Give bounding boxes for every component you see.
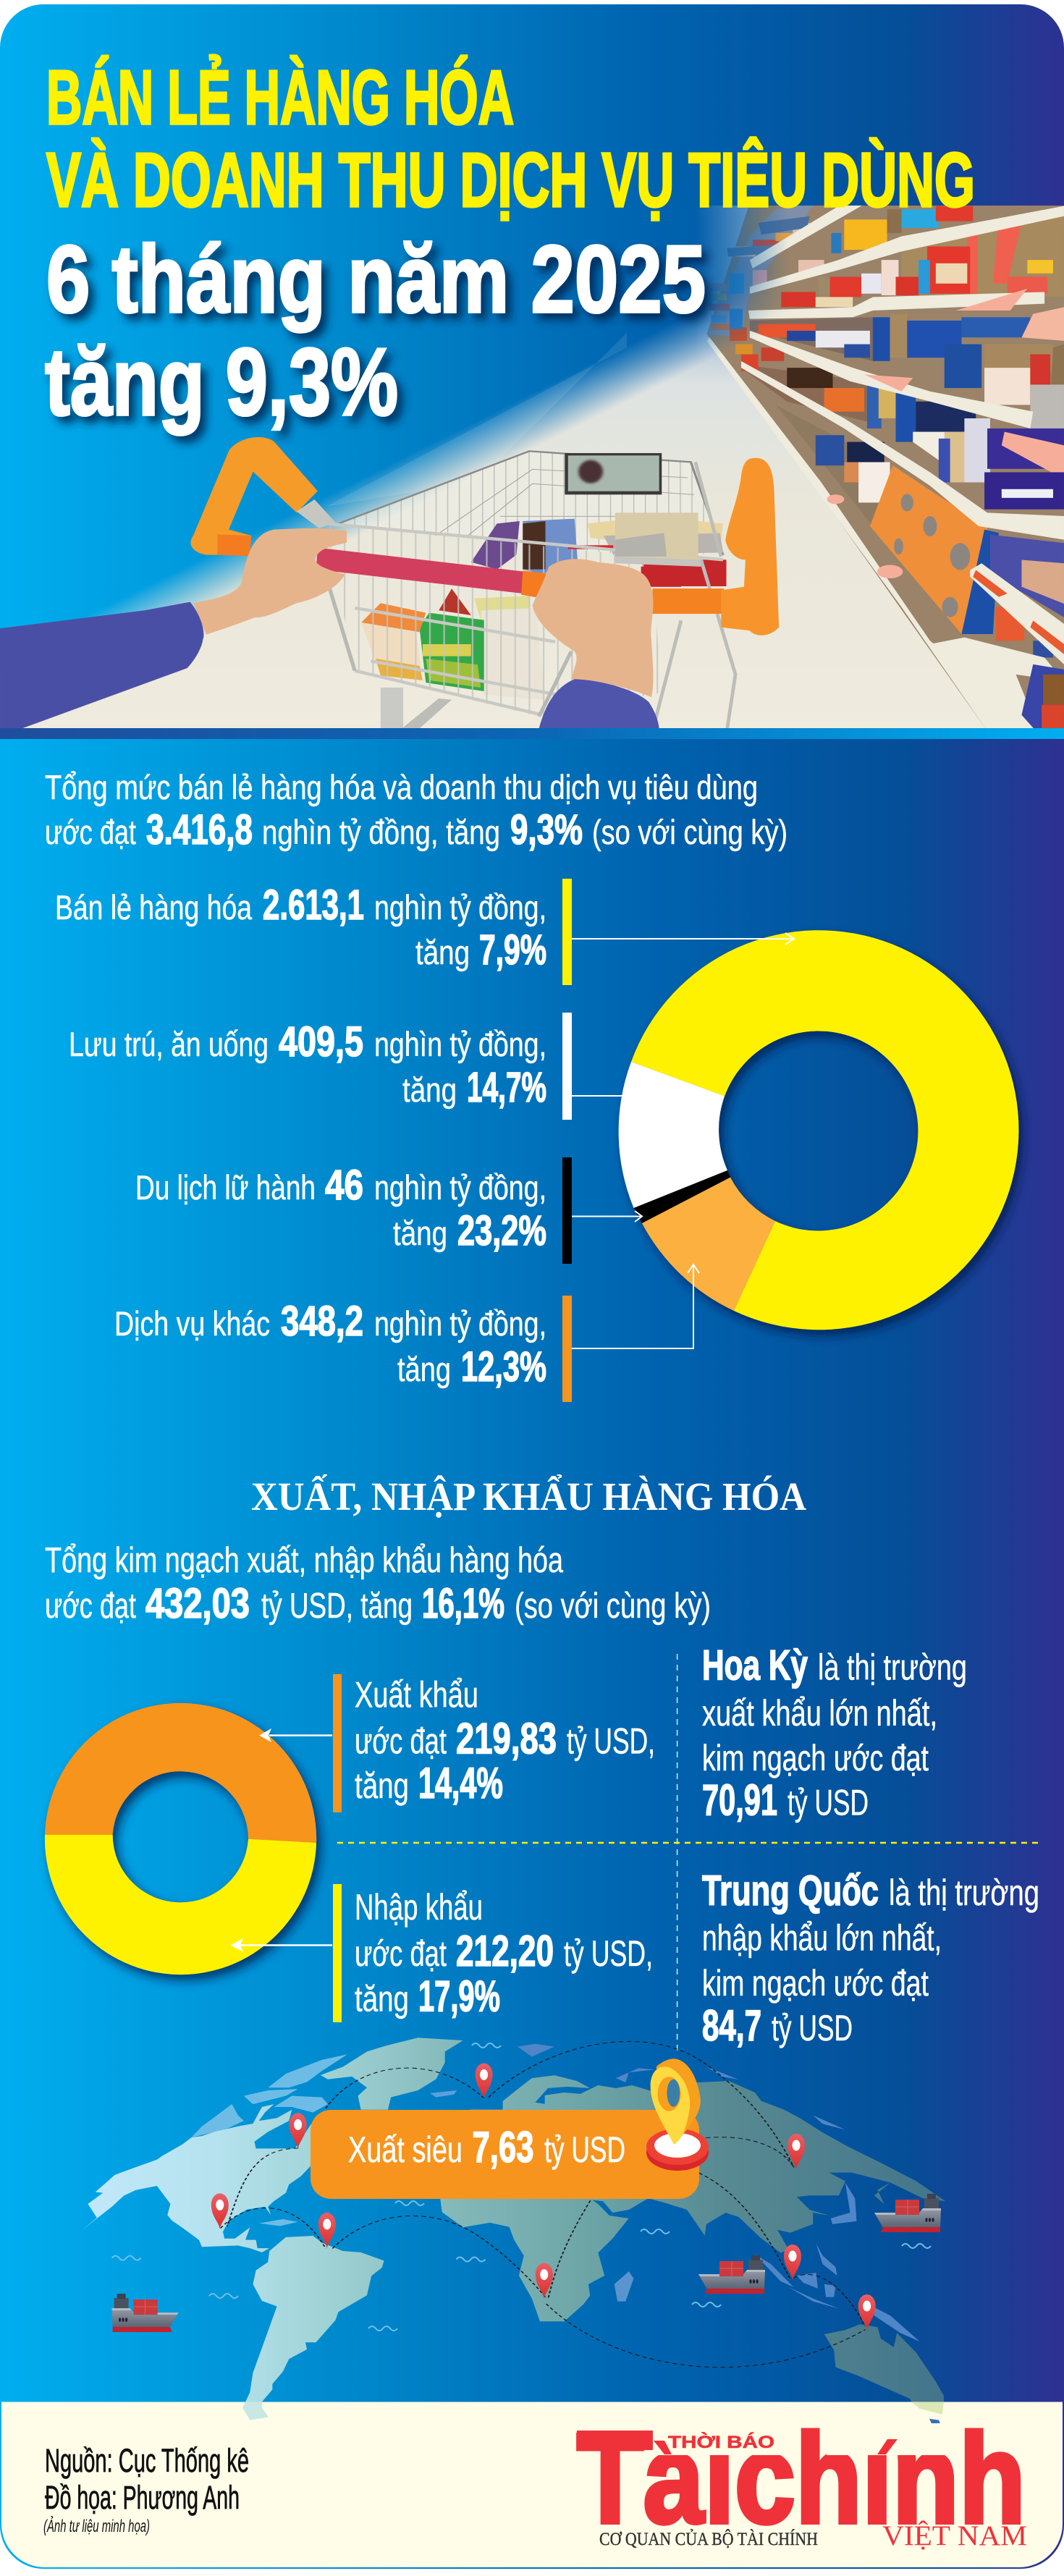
- callout: top export market: 70,91: [702, 1776, 777, 1825]
- segment: import: [45, 1835, 316, 1975]
- callout: top import market: [702, 1867, 1039, 2050]
- row: other services: 348,2: [281, 1298, 363, 1345]
- far shelf goods: [709, 216, 810, 355]
- row: other services: 12,3%: [461, 1343, 546, 1390]
- export block: 14,4%: [418, 1759, 503, 1807]
- intro text: trade total: Tổng kim ngạch xuất, nhập khẩu hàng hóa: [45, 1541, 564, 1580]
- intro text: retail total: ước đạt: [45, 813, 136, 851]
- shelf edges: [707, 203, 1064, 731]
- basket front: [326, 523, 662, 717]
- callout: top export market: tỷ USD: [788, 1783, 869, 1823]
- callout: trade surplus: Xuất siêu: [348, 2129, 463, 2170]
- import block: Nhập khẩu: [355, 1887, 483, 1927]
- row: tourism: [135, 1157, 642, 1264]
- intro text: retail total: [45, 768, 788, 853]
- import block: 212,20: [456, 1927, 554, 1975]
- segment: retail: [631, 930, 1018, 1330]
- callout: top export market: kim ngạch ước đạt: [702, 1738, 929, 1778]
- icon: big location pin: [646, 2058, 709, 2171]
- source credits: [43, 2442, 249, 2536]
- callout: top import market: Trung Quốc: [702, 1867, 879, 1914]
- source credits: Đồ họa: Phương Anh: [45, 2479, 240, 2516]
- row: retail goods: nghìn tỷ đồng,: [374, 888, 546, 926]
- export block: Xuất khẩu: [355, 1675, 478, 1715]
- row: accommodation and food: Lưu trú, ăn uống: [69, 1025, 269, 1063]
- europe, asia, africa, australia: [440, 2044, 945, 2431]
- segment: tourism: [634, 1170, 730, 1223]
- callout: top import market: nhập khẩu lớn nhất,: [702, 1918, 942, 1959]
- export block: tăng: [355, 1765, 409, 1806]
- row: accommodation and food: [69, 1013, 622, 1120]
- faint left shelf over blue: [326, 333, 627, 507]
- basket back: [339, 451, 720, 557]
- row: tourism: Du lịch lữ hành: [135, 1168, 316, 1207]
- callout: top import market: tỷ USD: [772, 2008, 853, 2048]
- world map: [82, 2037, 945, 2431]
- title: BÁN LẺ HÀNG HÓA: [46, 55, 514, 140]
- row: tourism: tăng: [393, 1214, 447, 1252]
- hero photo: supermarket aisle: [0, 203, 1064, 731]
- bottom-right products: [1021, 664, 1064, 731]
- row: accommodation and food: nghìn tỷ đồng,: [374, 1025, 546, 1063]
- export block: tỷ USD,: [567, 1721, 655, 1762]
- row: accommodation and food: 409,5: [279, 1018, 363, 1065]
- callout: top export market: là thị trường: [818, 1647, 967, 1688]
- dashed trade routes: [221, 2041, 865, 2368]
- aisle floor: [0, 206, 1064, 728]
- row: accommodation and food: 14,7%: [467, 1064, 546, 1111]
- intro text: trade total: 432,03: [145, 1580, 250, 1627]
- callout: trade surplus: 7,63: [472, 2123, 534, 2171]
- segment: other services: [642, 1178, 775, 1311]
- intro text: trade total: tỷ USD, tăng: [261, 1587, 413, 1626]
- title: [45, 55, 975, 435]
- segment: export: [45, 1703, 316, 1843]
- right hand and sleeve: [533, 559, 659, 729]
- intro text: retail total: 9,3%: [510, 806, 583, 853]
- row: other services: tăng: [397, 1350, 451, 1388]
- callout: top export market: Hoa Kỳ: [702, 1642, 808, 1689]
- row: other services: nghìn tỷ đồng,: [374, 1304, 546, 1343]
- import block: tăng: [355, 1979, 409, 2019]
- cargo ships: [112, 2194, 941, 2332]
- location pins: [211, 2063, 876, 2330]
- shelves and products: [707, 203, 1064, 731]
- export block: ước đạt: [355, 1721, 447, 1762]
- row: other services: Dịch vụ khác: [114, 1304, 270, 1343]
- export block: [259, 1674, 655, 1812]
- row: other services: [114, 1264, 699, 1402]
- row: accommodation and food: tăng: [402, 1070, 457, 1109]
- divider strip: [0, 728, 1064, 739]
- logo: Thời báo Tài chính Việt Nam: CƠ QUAN CỦA BỘ TÀI CHÍNH: [599, 2529, 818, 2549]
- red bar: [316, 548, 526, 594]
- donut chart: export vs import: [45, 1703, 316, 1975]
- row: tourism: nghìn tỷ đồng,: [374, 1168, 546, 1207]
- callout: trade surplus: [311, 2058, 709, 2199]
- segment: accommodation: [619, 1062, 727, 1208]
- price sign: [565, 453, 662, 494]
- export block: 219,83: [456, 1714, 557, 1763]
- title: 6 tháng năm 2025: [46, 226, 706, 332]
- row: retail goods: tăng: [415, 933, 470, 971]
- shopping cart: [0, 437, 727, 730]
- row: tourism: 23,2%: [457, 1207, 546, 1254]
- title: tăng 9,3%: [45, 329, 398, 435]
- intro text: trade total: [45, 1541, 711, 1627]
- donut chart: retail breakdown: [619, 930, 1018, 1330]
- import block: 17,9%: [418, 1972, 500, 2021]
- import block: [231, 1884, 653, 2022]
- callout: top export market: xuất khẩu lớn nhất,: [702, 1693, 937, 1733]
- intro text: trade total: 16,1%: [422, 1580, 504, 1627]
- intro text: retail total: (so với cùng kỳ): [592, 813, 788, 851]
- section heading: import export: XUẤT, NHẬP KHẨU HÀNG HÓA: [251, 1474, 806, 1519]
- left hand: [193, 528, 347, 635]
- callout: trade surplus: tỷ USD: [544, 2129, 625, 2170]
- callout: top export market: [702, 1642, 967, 1825]
- cart legs: [381, 688, 403, 730]
- cart goods: [471, 521, 520, 570]
- import block: ước đạt: [355, 1933, 447, 1974]
- source credits: (Ảnh tư liệu minh họa): [43, 2515, 150, 2536]
- row: retail goods: Bán lẻ hàng hóa: [55, 888, 253, 926]
- logo: Thời báo Tài chính Việt Nam: THỜI BÁO: [668, 2432, 774, 2452]
- intro text: trade total: ước đạt: [45, 1587, 136, 1626]
- intro text: trade total: (so với cùng kỳ): [515, 1587, 711, 1626]
- source credits: Nguồn: Cục Thống kê: [45, 2442, 249, 2479]
- intro text: retail total: nghìn tỷ đồng, tăng: [262, 813, 500, 851]
- import block: tỷ USD,: [564, 1933, 653, 1974]
- row: retail goods: [55, 879, 794, 985]
- row: tourism: 46: [325, 1162, 363, 1209]
- ocean waves: [112, 2043, 931, 2331]
- left handle: [190, 437, 318, 555]
- row: retail goods: 7,9%: [479, 926, 546, 974]
- americas and greenland: [82, 2037, 463, 2420]
- row: retail goods: 2.613,1: [263, 882, 364, 929]
- callout: top import market: 84,7: [702, 2001, 761, 2050]
- intro text: retail total: 3.416,8: [146, 806, 253, 853]
- logo: Thời báo Tài chính Việt Nam: VIỆT NAM: [882, 2520, 1027, 2551]
- right handle: [615, 458, 779, 731]
- callout: top import market: kim ngạch ước đạt: [702, 1963, 929, 2003]
- left sleeve: [0, 602, 204, 729]
- footer panel: [1, 2402, 1063, 2567]
- intro text: retail total: Tổng mức bán lẻ hàng hóa và doanh thu dịch vụ tiêu dùng: [45, 768, 758, 806]
